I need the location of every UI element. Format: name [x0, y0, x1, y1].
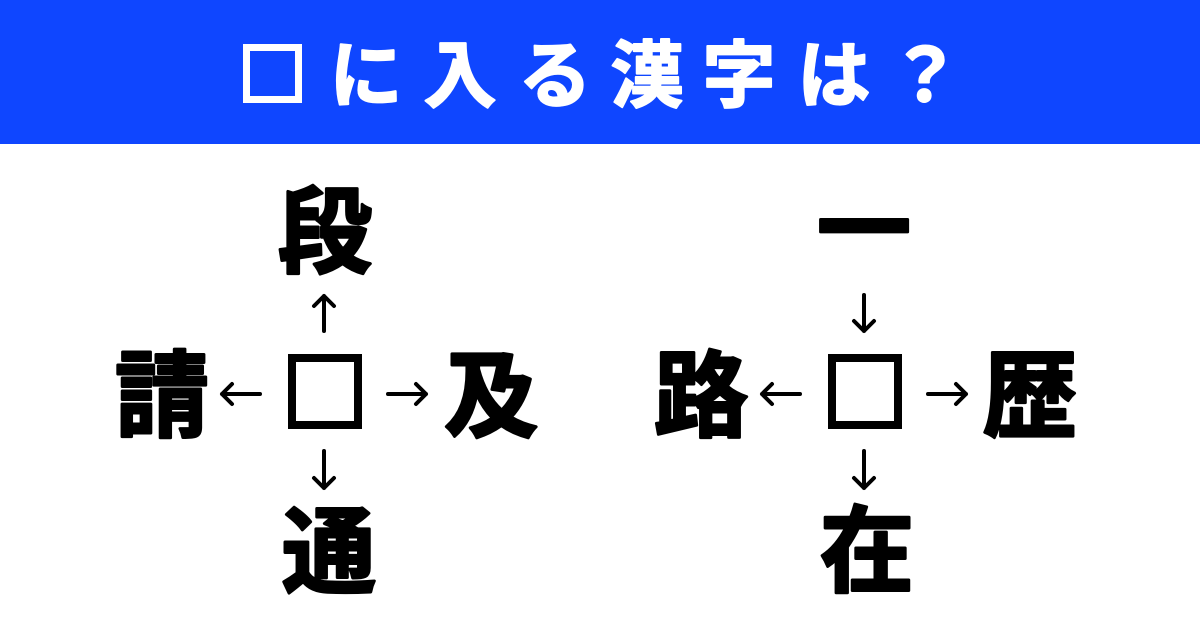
kanji right: 歴: 歴: [983, 344, 1077, 449]
title text: は: [798, 36, 870, 117]
arrow: right puzzle bottom down: [854, 451, 874, 488]
arrow: right puzzle left: [762, 384, 800, 404]
title text: 漢: [610, 36, 684, 117]
arrow: left puzzle left: [222, 384, 260, 404]
title text: [246, 36, 962, 117]
arrow: right puzzle top down: [854, 295, 874, 331]
right puzzle: [654, 177, 1077, 604]
kanji above: 一: 一: [817, 177, 911, 282]
kanji below: 通: 通: [282, 500, 376, 605]
arrow: left puzzle right: [388, 384, 426, 404]
kanji left: 請: 請: [115, 344, 209, 449]
title banner: [0, 0, 1200, 144]
title text: 字: [702, 36, 776, 117]
arrow: left puzzle up: [314, 296, 334, 331]
arrow: left puzzle down: [314, 451, 334, 488]
title text: る: [518, 36, 592, 117]
blank box: [292, 358, 358, 425]
arrow: right puzzle right: [928, 384, 966, 404]
left puzzle: [115, 180, 538, 605]
blank box: [832, 358, 898, 425]
title blank box: [246, 48, 298, 100]
title text: に: [330, 36, 402, 117]
kanji above: 段: 段: [278, 180, 372, 285]
kanji below: 在: 在: [820, 499, 914, 604]
kanji right: 及: 及: [444, 344, 538, 449]
title text: 入: [424, 36, 496, 117]
kanji left: 路: 路: [654, 344, 748, 449]
title text: ？: [888, 36, 962, 117]
